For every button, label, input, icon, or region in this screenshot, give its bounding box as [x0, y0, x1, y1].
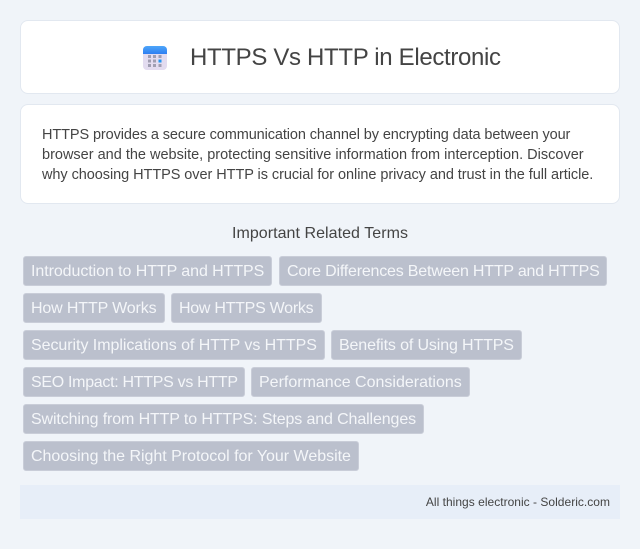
tag: Security Implications of HTTP vs HTTPS	[31, 337, 317, 354]
intro paragraph: HTTPS provides a secure communication channel by encrypting data between your	[42, 127, 570, 143]
icon: calendar grid	[143, 46, 167, 70]
tag	[23, 404, 424, 434]
intro paragraph	[42, 127, 593, 183]
intro paragraph: browser and the website, protecting sensitive information from interception. Discover	[42, 147, 584, 163]
tag: How HTTP Works	[31, 300, 156, 317]
heading: related terms: Important Related Terms	[232, 225, 408, 242]
tag	[23, 293, 165, 323]
tag	[279, 256, 607, 286]
intro paragraph: why choosing HTTPS over HTTP is crucial for online privacy and trust in the full article.	[42, 167, 593, 183]
panel: term tags	[23, 256, 607, 471]
tag: Choosing the Right Protocol for Your Website	[31, 448, 351, 465]
tag: SEO Impact: HTTPS vs HTTP	[31, 374, 238, 391]
tag: Switching from HTTP to HTTPS: Steps and Challenges	[31, 411, 416, 428]
tag: Benefits of Using HTTPS	[339, 337, 514, 354]
tag	[23, 441, 359, 471]
tag	[171, 293, 322, 323]
tag	[23, 256, 272, 286]
panel: title card	[20, 20, 620, 94]
panel: intro text	[20, 104, 620, 204]
tag: Core Differences Between HTTP and HTTPS	[287, 263, 600, 280]
tag	[23, 367, 245, 397]
tag	[23, 330, 325, 360]
title: HTTPS Vs HTTP in Electronic	[190, 44, 501, 71]
footer bar	[20, 485, 620, 519]
tag	[251, 367, 470, 397]
tag: Introduction to HTTP and HTTPS	[31, 263, 264, 280]
footer credit: All things electronic - Solderic.com	[426, 495, 610, 509]
tag: How HTTPS Works	[179, 300, 313, 317]
tag: Performance Considerations	[259, 374, 462, 391]
tag	[331, 330, 522, 360]
